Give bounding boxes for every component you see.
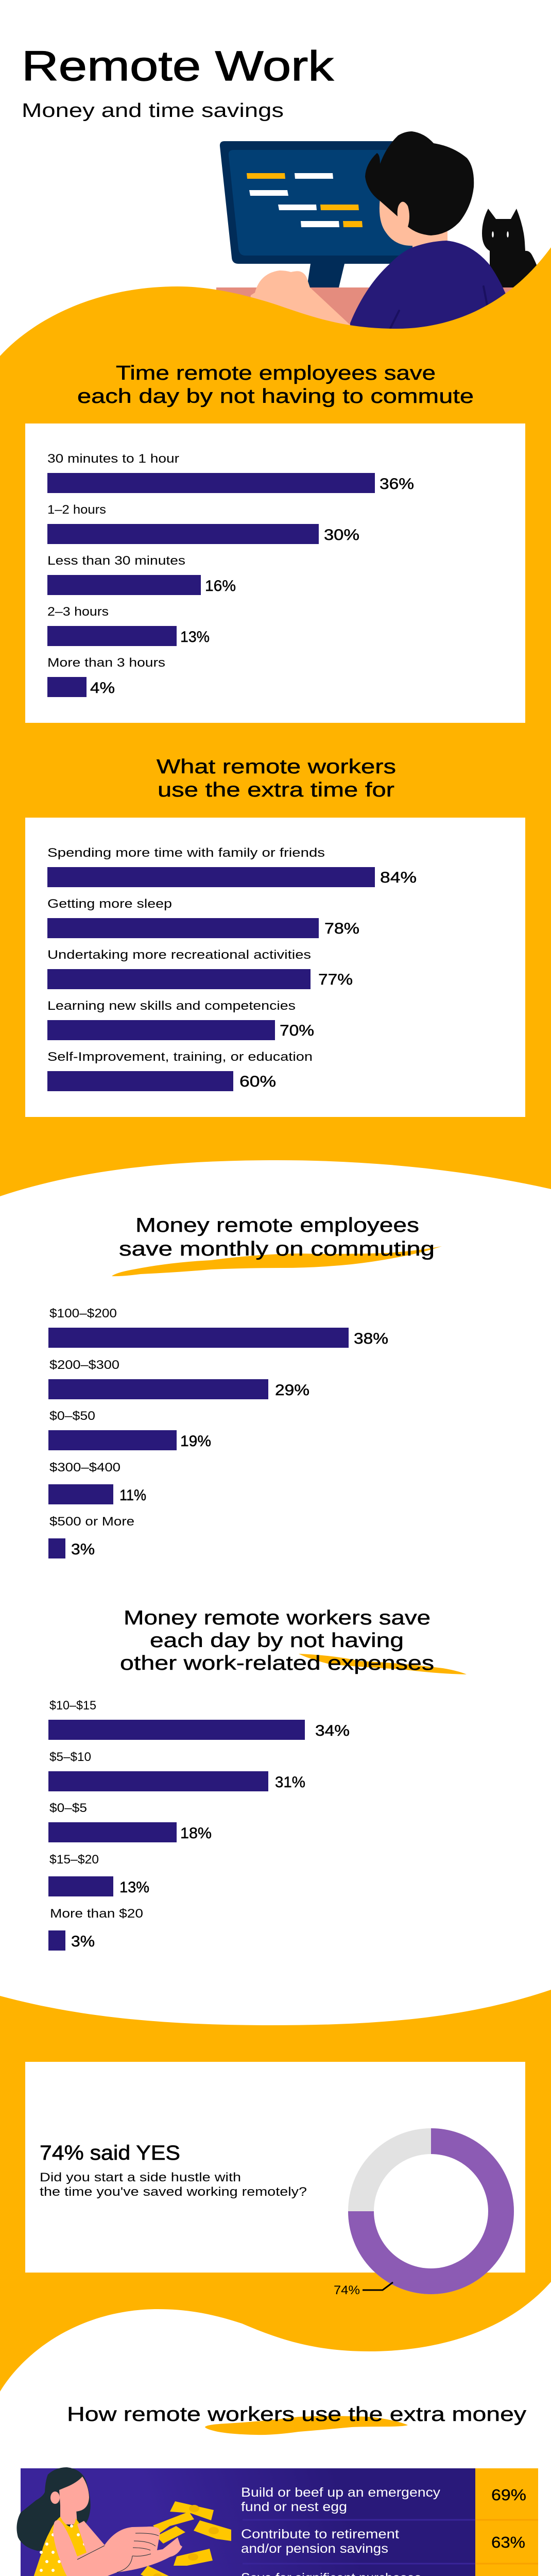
bar: $0-$5: 18% xyxy=(180,1825,212,1842)
bar chart: other expenses savings xyxy=(48,1699,350,1951)
heading: time saved: Time remote employees save xyxy=(116,362,436,384)
bar: more sleep xyxy=(47,897,359,938)
bar: more sleep: Getting more sleep xyxy=(47,897,172,911)
bar: family or friends: 84% xyxy=(380,869,417,886)
bar: family or friends xyxy=(47,846,417,887)
bar: family or friends: Spending more time with family or friends xyxy=(47,846,325,860)
bar: $5-$10: 31% xyxy=(275,1774,305,1791)
heading: extra money use: How remote workers use the extra money xyxy=(67,2403,527,2426)
bar: 2-3 hours xyxy=(47,605,210,646)
swoosh: extra money heading xyxy=(205,2416,408,2435)
heading: monthly commuting savings xyxy=(119,1214,435,1260)
bar: new skills: Learning new skills and competencies xyxy=(47,999,296,1013)
bar: $15-$20 xyxy=(48,1853,149,1896)
bar: recreational activities xyxy=(47,948,353,989)
cat xyxy=(482,209,538,287)
bar: $0-$50 xyxy=(48,1409,211,1450)
banknote symbols xyxy=(112,2505,219,2576)
heading: monthly commuting savings: Money remote employees xyxy=(135,1214,419,1236)
heading: other expenses savings xyxy=(120,1607,434,1674)
bar: $0-$5 xyxy=(48,1801,212,1842)
panel: how extra money is used xyxy=(16,2467,538,2576)
heading: extra time use xyxy=(157,756,396,801)
bar: self-improvement: Self-Improvement, training, or education xyxy=(47,1050,313,1064)
bar: $10-$15 xyxy=(48,1699,350,1740)
bar: self-improvement: 60% xyxy=(239,1073,276,1090)
heading: extra time use: What remote workers xyxy=(157,756,396,778)
arm and hands xyxy=(53,2520,182,2576)
yellow background band: side hustle section xyxy=(0,1990,551,2392)
row: emergency fund xyxy=(241,2485,526,2514)
bar: more than 3 hours xyxy=(47,656,165,697)
bar: $500 or more: 3% xyxy=(71,1541,95,1558)
bar: 30 minutes to 1 hour xyxy=(47,452,414,493)
bar: more than $20: 3% xyxy=(71,1933,95,1950)
donut chart: 74% yes xyxy=(361,2141,501,2281)
bar: 1-2 hours: 1–2 hours xyxy=(47,503,106,517)
row: emergency fund: 69% xyxy=(491,2486,526,2504)
head and neck xyxy=(380,196,447,248)
bar: $300-$400: $300–$400 xyxy=(49,1461,120,1475)
bar: more than 3 hours: More than 3 hours xyxy=(47,656,165,670)
bar: $0-$50: 19% xyxy=(180,1433,211,1450)
panel: commute time saved bar chart xyxy=(25,423,525,723)
bar: $200-$300 xyxy=(48,1358,309,1399)
bar: $15-$20: $15–$20 xyxy=(49,1853,99,1867)
bar: 2-3 hours: 13% xyxy=(180,629,210,646)
illustration: woman with money xyxy=(16,2467,231,2576)
bar: less than 30 minutes: 16% xyxy=(205,578,236,595)
row: retirement savings xyxy=(241,2527,525,2556)
bar: 2-3 hours: 2–3 hours xyxy=(47,605,109,619)
bar: new skills: 70% xyxy=(280,1022,314,1039)
yellow background band: time section xyxy=(0,247,551,1196)
bar: more sleep: 78% xyxy=(324,920,359,937)
row: emergency fund: Build or beef up an emergency xyxy=(241,2485,441,2500)
percentage column xyxy=(475,2468,538,2576)
illustration: person at computer with cat xyxy=(216,131,551,339)
panel background xyxy=(21,2468,475,2576)
row: emergency fund: fund or nest egg xyxy=(241,2500,347,2514)
row: retirement savings: 63% xyxy=(491,2533,525,2551)
swoosh: commuting heading xyxy=(112,1246,442,1276)
monitor xyxy=(220,141,412,264)
bar: $15-$20: 13% xyxy=(119,1879,149,1896)
title: Remote Work xyxy=(22,43,334,90)
panel: extra time bar chart xyxy=(25,818,525,1117)
monitor stand xyxy=(307,264,345,287)
heading: monthly commuting savings: save monthly on commuting xyxy=(119,1238,435,1260)
torso xyxy=(350,241,510,335)
bar: $300-$400 xyxy=(48,1461,146,1504)
face xyxy=(59,2477,89,2512)
back hair xyxy=(16,2467,91,2551)
ear xyxy=(50,2492,60,2504)
bar: new skills xyxy=(47,999,314,1040)
bar: 1-2 hours: 30% xyxy=(324,527,359,544)
subtitle: Money and time savings xyxy=(22,100,284,122)
bar: $100-$200: $100–$200 xyxy=(49,1307,117,1320)
question text: Did you start a side hustle with xyxy=(40,2171,241,2184)
bar: recreational activities: Undertaking more recreational activities xyxy=(47,948,311,962)
bar: $500 or more xyxy=(48,1515,134,1558)
swoosh: expenses heading xyxy=(299,1654,467,1674)
bar: $5-$10 xyxy=(48,1750,305,1791)
donut callout: 74%: 74% xyxy=(334,2283,360,2297)
bar: self-improvement xyxy=(47,1050,313,1091)
bar: $100-$200 xyxy=(48,1307,388,1348)
hand and arm xyxy=(247,270,355,330)
question text xyxy=(40,2171,307,2199)
bar: $100-$200: 38% xyxy=(354,1330,388,1347)
bar chart: monthly commuting savings xyxy=(48,1307,388,1558)
heading: time saved: each day by not having to commute xyxy=(77,385,474,408)
flying banknotes xyxy=(99,2501,231,2576)
heading: other expenses savings: other work-related expenses xyxy=(120,1652,434,1674)
bar: more than $20: More than $20 xyxy=(50,1907,143,1921)
row: retirement savings: and/or pension savings xyxy=(241,2541,388,2556)
bar: more than 3 hours: 4% xyxy=(90,680,115,697)
bar: $0-$50: $0–$50 xyxy=(49,1409,95,1423)
question text: the time you've saved working remotely? xyxy=(40,2185,307,2199)
polka dot top xyxy=(32,2517,95,2576)
bar: recreational activities: 77% xyxy=(318,971,353,988)
bar: less than 30 minutes xyxy=(47,554,236,595)
heading: other expenses savings: Money remote workers save xyxy=(124,1607,431,1629)
neck xyxy=(60,2504,77,2524)
bar: more than $20 xyxy=(48,1907,143,1951)
bar: $10-$15: $10–$15 xyxy=(49,1699,96,1713)
heading: extra time use: use the extra time for xyxy=(158,779,394,801)
bar: $10-$15: 34% xyxy=(315,1722,350,1739)
bar: $500 or more: $500 or More xyxy=(49,1515,134,1529)
bar: less than 30 minutes: Less than 30 minutes xyxy=(47,554,185,568)
row: retirement savings: Contribute to retirement xyxy=(241,2527,399,2541)
desk xyxy=(216,287,551,339)
donut callout: 74% xyxy=(334,2282,393,2297)
bar: $300-$400: 11% xyxy=(119,1487,146,1504)
bar: $200-$300: $200–$300 xyxy=(49,1358,119,1372)
bar: 1-2 hours xyxy=(47,503,359,544)
stat heading: 74% said yes: 74% said YES xyxy=(40,2142,180,2164)
bar: $5-$10: $5–$10 xyxy=(49,1750,91,1764)
heading: time saved xyxy=(77,362,474,408)
bar: $0-$5: $0–$5 xyxy=(49,1801,87,1815)
bar: 30 minutes to 1 hour: 36% xyxy=(380,476,414,493)
bar: 30 minutes to 1 hour: 30 minutes to 1 hour xyxy=(47,452,179,466)
money in hand xyxy=(151,2512,194,2554)
panel: side hustle xyxy=(25,2062,525,2273)
heading: other expenses savings: each day by not having xyxy=(150,1630,404,1652)
bar: $200-$300: 29% xyxy=(275,1382,309,1399)
hair xyxy=(365,131,474,235)
